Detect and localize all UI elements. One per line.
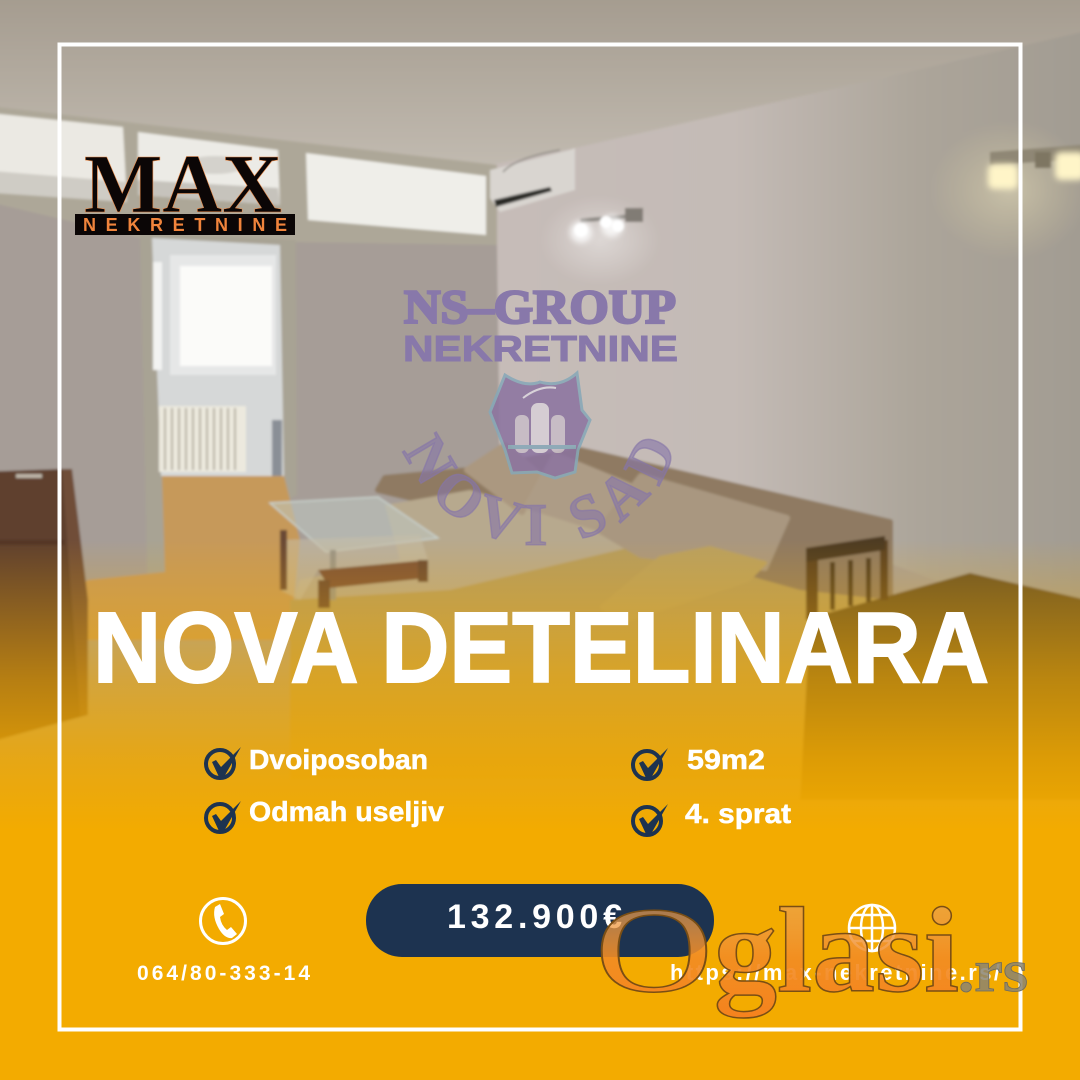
dining table and chair bbox=[800, 536, 1080, 800]
watermark heading: NS–GROUP bbox=[404, 281, 676, 334]
watermark: Oglasi.rs: .rs bbox=[958, 938, 1028, 1004]
watermark: Oglasi.rs bbox=[595, 883, 1028, 1018]
transom frame band bbox=[0, 105, 497, 245]
feature: 4. sprat: 4. sprat bbox=[685, 798, 791, 829]
door frame and inner room bbox=[0, 232, 300, 640]
wall lamp yellow bbox=[930, 120, 1080, 260]
feature: 59m2: 59m2 bbox=[687, 744, 765, 775]
price pill: 132.900€ bbox=[447, 898, 622, 936]
cabinet bbox=[0, 469, 88, 745]
price pill bbox=[366, 884, 714, 957]
feature: Odmah useljiv: Odmah useljiv bbox=[249, 796, 444, 827]
watermark shield bbox=[490, 373, 590, 478]
feature: 59m2 bbox=[633, 744, 765, 779]
feature: Odmah useljiv bbox=[206, 796, 444, 832]
left wall bbox=[0, 195, 500, 600]
feature list bbox=[206, 744, 791, 835]
watermark: Oglasi.rs: glasi bbox=[714, 883, 959, 1018]
right wall bbox=[490, 28, 1080, 640]
watermark curved text: NOVI SAD bbox=[402, 431, 672, 546]
air conditioner bbox=[490, 148, 575, 212]
transom windows bbox=[0, 112, 486, 235]
phone number: 064/80-333-14 bbox=[137, 962, 310, 985]
coffee table bbox=[270, 497, 438, 608]
logo word MAX: MAX bbox=[84, 138, 282, 231]
wall lamp white bbox=[540, 195, 660, 285]
logo: MAX Nekretnine bbox=[75, 138, 295, 235]
feature: Dvoiposoban: Dvoiposoban bbox=[249, 744, 428, 775]
logo banner: NEKRETNINE bbox=[83, 215, 287, 235]
ceiling bbox=[0, 0, 1080, 172]
title: NOVA DETELINARA bbox=[93, 592, 989, 704]
watermark: NS-GROUP Nekretnine Novi Sad bbox=[402, 281, 678, 546]
icon: phone bbox=[200, 898, 246, 944]
website url: https://max-nekretnine.rs/ bbox=[670, 960, 1000, 985]
yellow gradient overlay bbox=[0, 540, 1080, 830]
watermark subheading: NEKRETNINE bbox=[403, 328, 678, 369]
icon: globe bbox=[849, 905, 895, 951]
watermark: Oglasi.rs: O bbox=[595, 883, 713, 1018]
feature: 4. sprat bbox=[633, 798, 791, 835]
sofa bbox=[290, 445, 890, 780]
